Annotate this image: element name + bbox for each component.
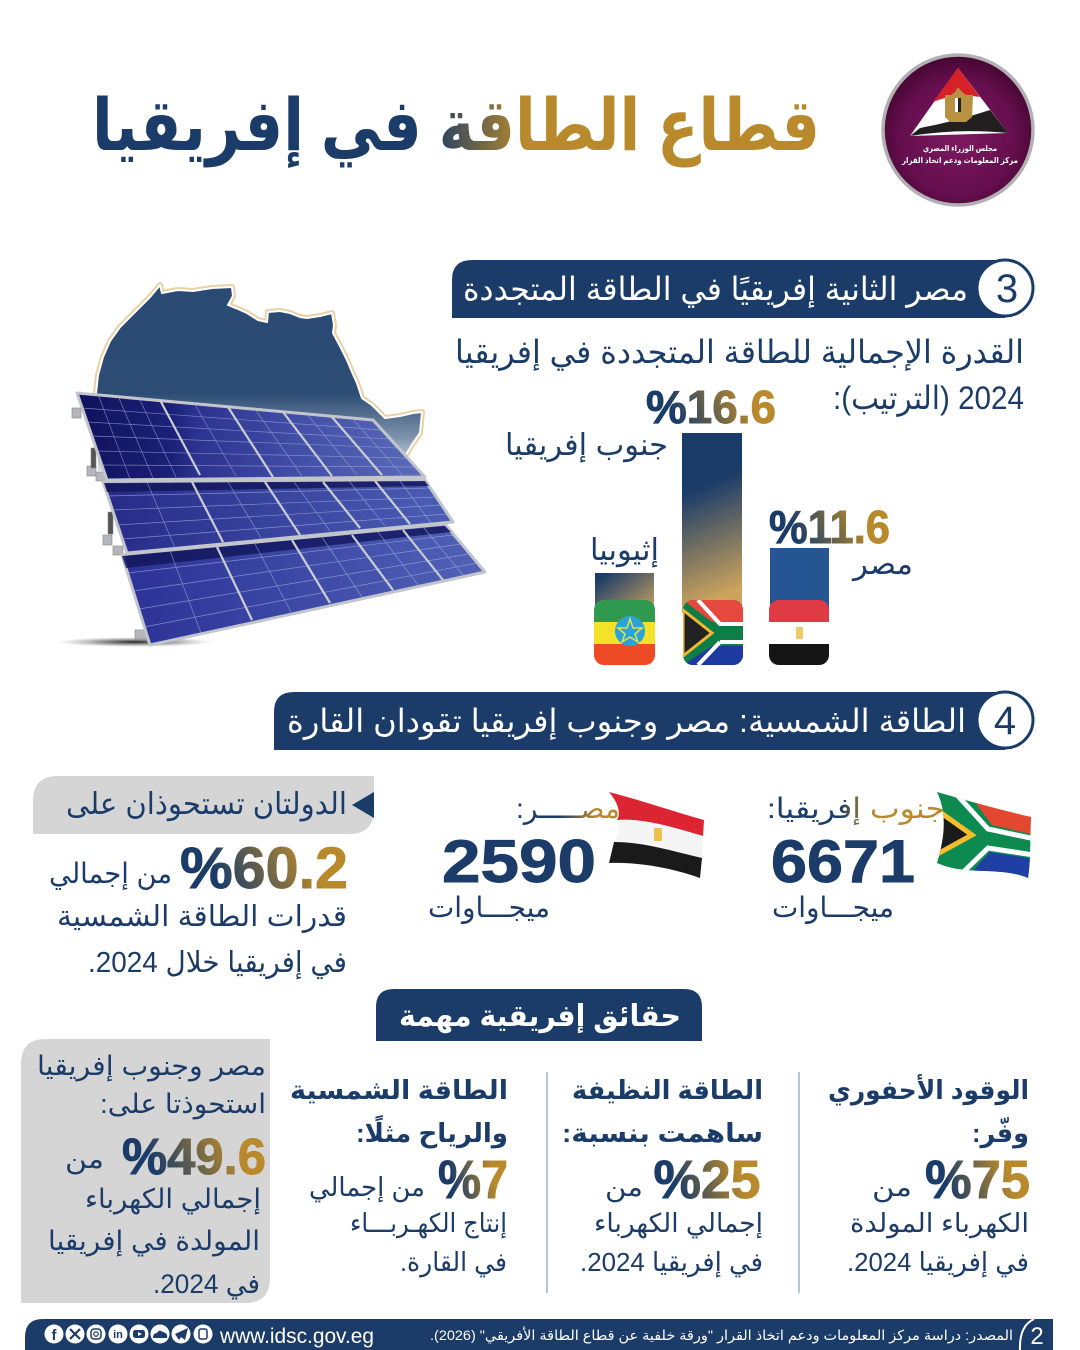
fact: clean energy: إجمالي الكهرباء bbox=[594, 1208, 763, 1239]
fact: fossil fuels: من bbox=[872, 1172, 912, 1203]
number badge 4 bbox=[977, 692, 1033, 748]
fact: solar and wind bbox=[290, 1075, 508, 1277]
section 3 subtitle: القدرة الإجمالية للطاقة المتجددة في إفريقيا bbox=[455, 334, 1024, 371]
logo caption: مجلس الوزراء المصري bbox=[923, 144, 997, 154]
bar: South Africa: جنوب إفريقيا bbox=[505, 429, 668, 463]
callout text bbox=[49, 858, 347, 980]
section 4 header bbox=[274, 692, 1033, 750]
label: جنوب إفريقيا: bbox=[767, 793, 945, 825]
panel: Egypt and South Africa share: المولدة في إفريقيا bbox=[48, 1226, 260, 1257]
fact: solar and wind: من إجمالي bbox=[309, 1172, 425, 1203]
panel: Egypt and South Africa share: إجمالي الكهرباء bbox=[85, 1184, 261, 1215]
logo: IDSC emblem bbox=[883, 55, 1033, 205]
number badge 4: 4 bbox=[994, 699, 1016, 743]
bar: Egypt bbox=[769, 501, 913, 665]
fact: clean energy: الطاقة النظيفة bbox=[572, 1075, 763, 1105]
panel: Egypt and South Africa share bbox=[21, 1039, 270, 1303]
fact: solar and wind: %7 bbox=[438, 1150, 508, 1210]
number badge 3: 3 bbox=[996, 267, 1018, 311]
panel: Egypt and South Africa share: مصر وجنوب إفريقيا bbox=[37, 1051, 266, 1082]
unit: ميجـــاوات bbox=[772, 892, 894, 924]
panel row 3 bbox=[122, 524, 485, 645]
fact: solar and wind: الطاقة الشمسية bbox=[290, 1075, 508, 1105]
panel row 1 bbox=[77, 393, 425, 480]
brackets bbox=[72, 408, 147, 639]
section 3 subtitle bbox=[455, 334, 1024, 417]
bar: South Africa bbox=[505, 381, 776, 665]
panel: Egypt and South Africa share: من bbox=[65, 1144, 104, 1175]
Africa map bbox=[96, 285, 422, 472]
fact: fossil fuels: %75 bbox=[925, 1150, 1030, 1210]
callout: combined solar share bbox=[33, 776, 374, 980]
callout heading box bbox=[33, 776, 374, 834]
panel: Egypt and South Africa share: في 2024. bbox=[153, 1269, 260, 1300]
fact: clean energy: من bbox=[605, 1172, 643, 1203]
fact: solar and wind: في القارة. bbox=[400, 1247, 507, 1277]
facts heading bbox=[376, 989, 702, 1041]
fact: fossil fuels: وفّر: bbox=[972, 1117, 1029, 1149]
fact: fossil fuels bbox=[828, 1074, 1030, 1278]
flag: South Africa bbox=[937, 792, 1031, 878]
value 6671: 6671 bbox=[771, 828, 915, 895]
callout heading box: الدولتان تستحوذان على bbox=[66, 788, 347, 822]
label: مصـــــر: bbox=[516, 793, 620, 825]
bar chart: renewable capacity share bbox=[505, 381, 913, 665]
fact: fossil fuels: الوقود الأحفوري bbox=[828, 1074, 1029, 1106]
bar: Ethiopia bbox=[590, 534, 659, 665]
bar: Egypt: مصر bbox=[851, 548, 913, 581]
facts heading: حقائق إفريقية مهمة bbox=[399, 1000, 681, 1034]
section 3 heading text: مصر الثانية إفريقيًا في الطاقة المتجددة bbox=[463, 271, 968, 308]
unit: ميجـــاوات bbox=[428, 892, 550, 924]
social icons: f bbox=[52, 1327, 58, 1344]
social icons: in bbox=[113, 1329, 123, 1341]
logo caption bbox=[901, 144, 1018, 165]
logo triangle bbox=[910, 68, 1008, 136]
fact: fossil fuels: الكهرباء المولدة bbox=[850, 1208, 1029, 1239]
fact: clean energy: %25 bbox=[654, 1150, 760, 1210]
callout text: من إجمالي bbox=[49, 858, 172, 890]
fact: clean energy bbox=[562, 1075, 763, 1278]
fact: clean energy: في إفريقيا 2024. bbox=[580, 1247, 763, 1278]
value 60.2: %60.2 bbox=[180, 836, 348, 901]
panel row 2 bbox=[103, 480, 453, 553]
panel: Egypt and South Africa share: استحوذتا على: bbox=[100, 1089, 266, 1120]
stat: South Africa solar bbox=[767, 785, 1040, 924]
title: قطاع الطاقة في إفريقيا bbox=[92, 86, 820, 168]
bar: Egypt: %11.6 bbox=[769, 501, 890, 553]
flag: Egypt bbox=[609, 792, 704, 878]
fact: clean energy: ساهمت بنسبة: bbox=[562, 1118, 763, 1148]
stat: Egypt solar bbox=[428, 792, 704, 924]
logo caption: مركز المعلومات ودعم اتخاذ القرار bbox=[901, 156, 1018, 165]
section 3 subtitle: 2024 (الترتيب): bbox=[833, 380, 1024, 417]
bar: Ethiopia: إثيوبيا bbox=[590, 534, 659, 568]
illustration: Africa map with solar panels bbox=[57, 285, 485, 647]
social icons bbox=[44, 1324, 212, 1344]
section 4 heading text: الطاقة الشمسية: مصر وجنوب إفريقيا تقودان القارة bbox=[287, 703, 966, 740]
footer bar bbox=[25, 1319, 1053, 1350]
value 2590: 2590 bbox=[442, 828, 596, 895]
shadow bbox=[57, 637, 213, 647]
fact: fossil fuels: في إفريقيا 2024. bbox=[847, 1247, 1029, 1278]
website: www.idsc.gov.eg bbox=[219, 1325, 374, 1348]
fact: solar and wind: إنتاج الكهـربـــاء bbox=[350, 1208, 507, 1239]
source: المصدر: دراسة مركز المعلومات ودعم اتخاذ القرار "ورقة خلفية عن قطاع الطاقة الأفريقي" (2026). bbox=[430, 1326, 1013, 1344]
section 3 header bbox=[452, 260, 1033, 318]
panel: Egypt and South Africa share: %49.6 bbox=[122, 1128, 266, 1185]
fact: solar and wind: والرياح مثلًا: bbox=[356, 1114, 508, 1149]
number badge 3 bbox=[977, 260, 1033, 316]
bar: South Africa: %16.6 bbox=[646, 381, 776, 433]
callout text: في إفريقيا خلال 2024. bbox=[88, 947, 347, 980]
callout text: قدرات الطاقة الشمسية bbox=[57, 901, 347, 933]
page number: 2 bbox=[1030, 1323, 1044, 1350]
